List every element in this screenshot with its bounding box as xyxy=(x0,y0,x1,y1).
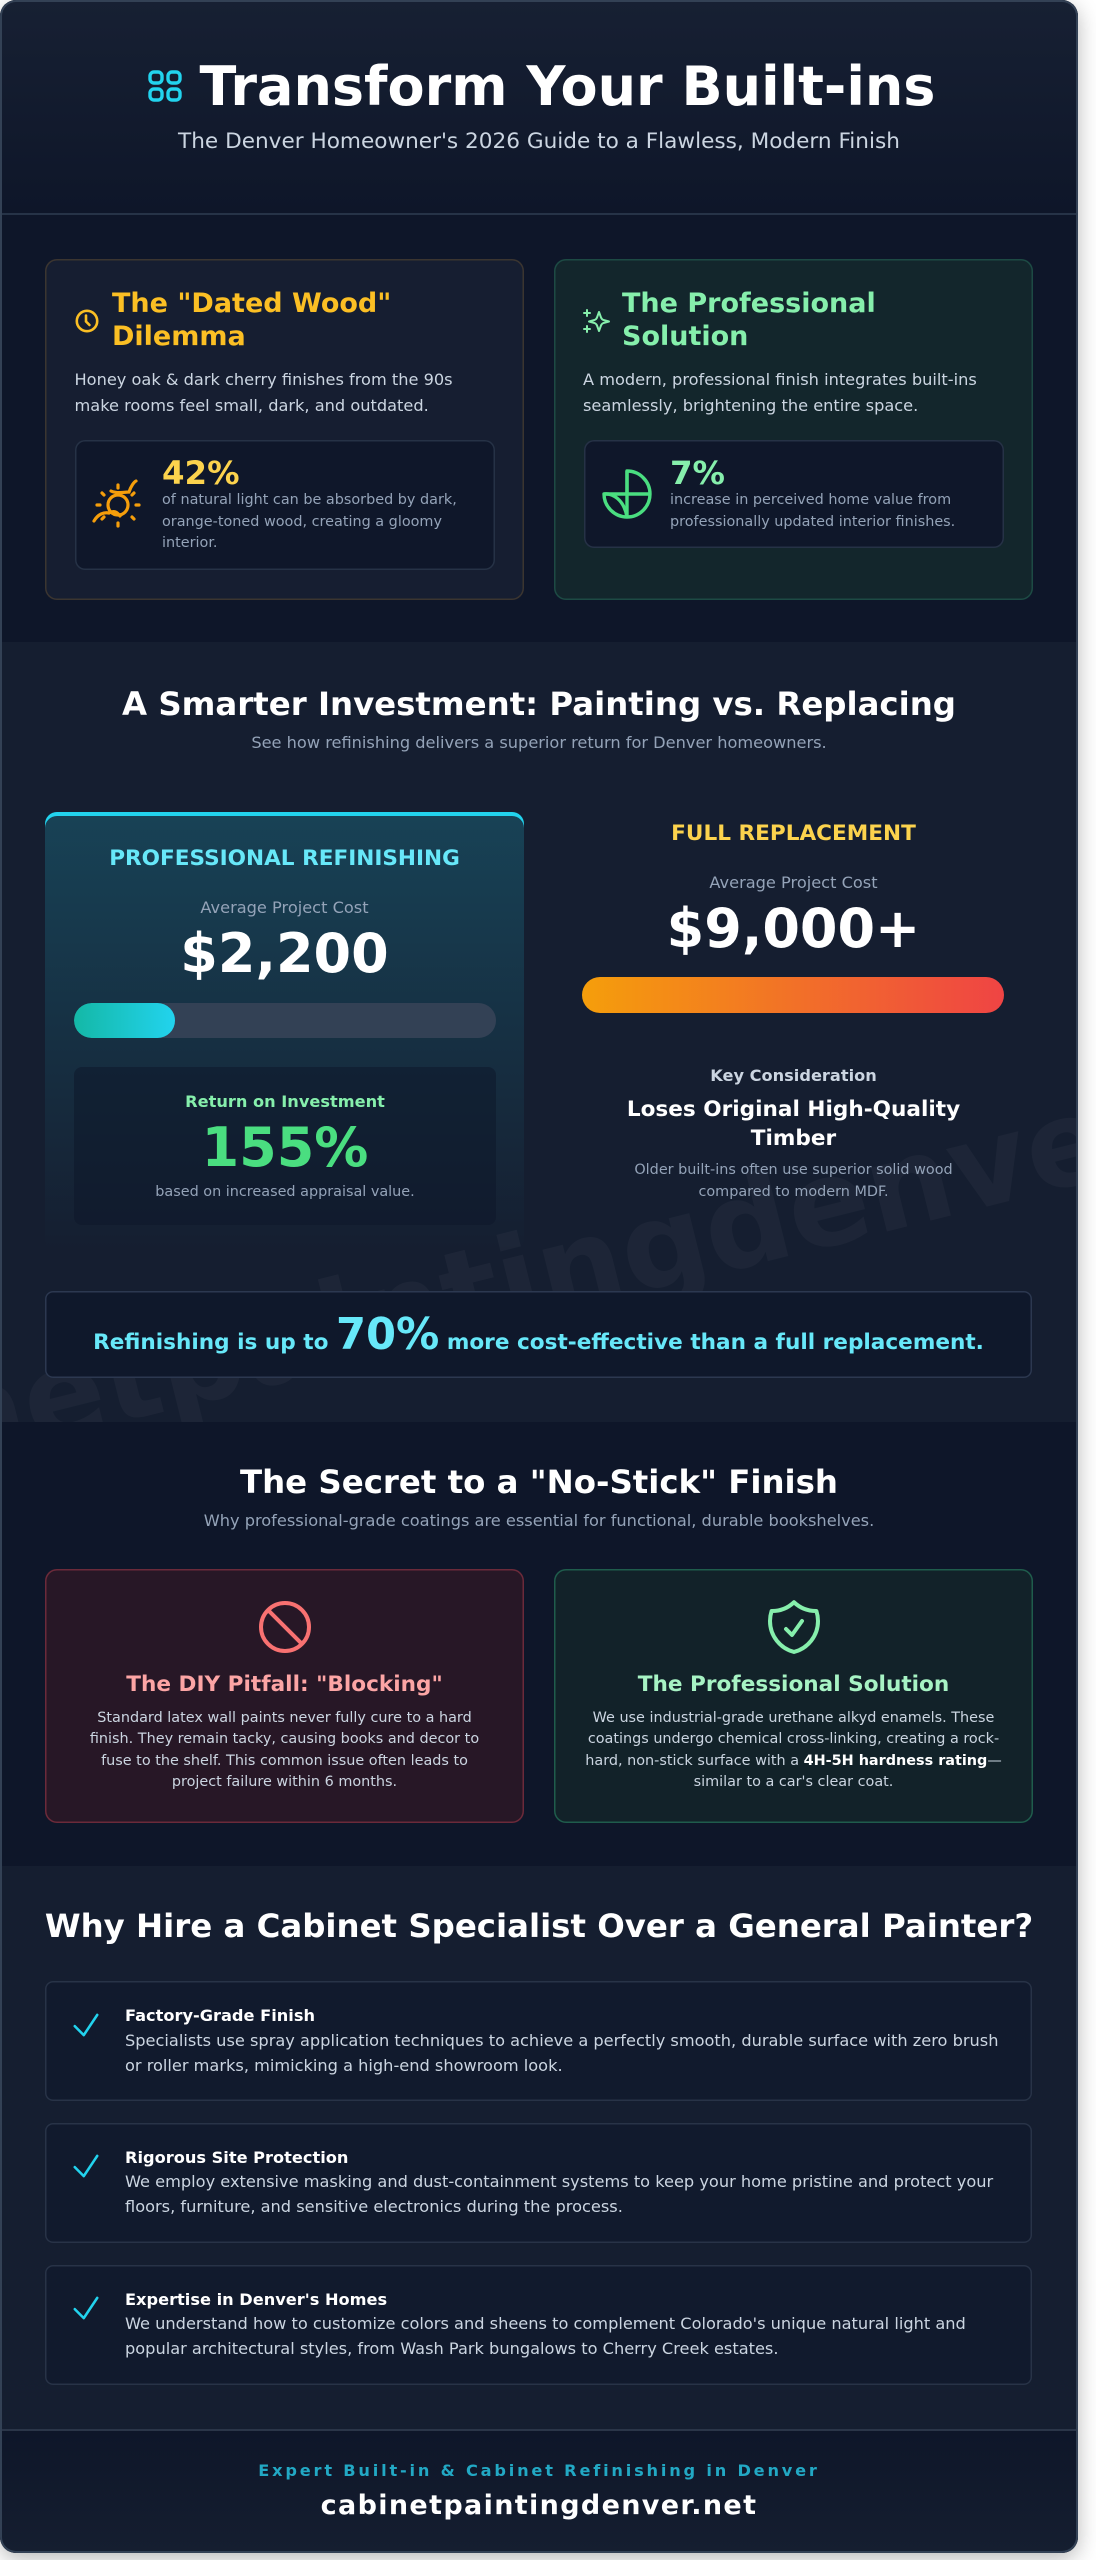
text: stat caption xyxy=(162,492,457,551)
text: section subtitle: Why professional-grade coatings are essential for functional, durable bookshelves. xyxy=(204,1511,874,1530)
header xyxy=(0,0,1078,215)
heading: professional solution: Solution xyxy=(622,321,748,352)
text: blocking description: finish. They remain tacky, causing books and decor to xyxy=(90,1731,479,1747)
subtitle: The Denver Homeowner's 2026 Guide to a Flawless, Modern Finish xyxy=(178,129,900,154)
text: stat caption xyxy=(670,492,955,530)
text: blocking description: fuse to the shelf. This common issue often leads to xyxy=(101,1753,468,1769)
heading: professional solution: The Professional Solution xyxy=(638,1672,949,1697)
text: protection description xyxy=(125,2172,994,2216)
callout: 70 percent banner: Refinishing is up to 70% more cost-effective than a full replacement. xyxy=(93,1310,984,1360)
text: solution description: A modern, professional finish integrates built-ins xyxy=(583,370,977,389)
icon: check xyxy=(73,2154,99,2178)
value: 7%: 7% xyxy=(670,454,725,492)
text: older built-ins: compared to modern MDF. xyxy=(698,1184,889,1200)
list item: site protection xyxy=(45,2122,1032,2242)
list item: denver expertise xyxy=(45,2264,1032,2384)
text: loses timber: Timber xyxy=(751,1126,836,1150)
text: older built-ins: Older built-ins often use superior solid wood xyxy=(634,1162,953,1178)
section: cost comparison xyxy=(0,642,1078,1422)
text: denver description: popular architectural styles, from Wash Park bungalows to Cherry Creek estates. xyxy=(125,2339,779,2358)
panel: full replacement xyxy=(582,821,1004,1200)
value: 155 percent: 155% xyxy=(202,1116,368,1179)
text: coating description: coatings undergo chemical cross-linking, creating a rock- xyxy=(588,1731,999,1747)
stat: 7 percent xyxy=(584,440,1004,548)
label: refinishing: PROFESSIONAL REFINISHING xyxy=(109,846,460,871)
heading: professional solution: The Professional xyxy=(622,288,876,319)
text: dated wood description: Honey oak & dark cherry finishes from the 90s xyxy=(74,370,453,389)
label: average cost: Average Project Cost xyxy=(709,872,878,892)
heading: dated wood xyxy=(112,288,391,352)
section: problem and solution xyxy=(0,215,1078,642)
label: full replacement: FULL REPLACEMENT xyxy=(671,821,916,846)
text: factory description: or roller marks, mimicking a high-end showroom look. xyxy=(125,2056,563,2074)
text: stat caption: increase in perceived home value from xyxy=(670,492,951,508)
text: loses timber: Loses Original High-Quality xyxy=(627,1096,960,1122)
text: coating description: similar to a car's clear coat. xyxy=(694,1774,893,1790)
tagline: Expert Built-in & Cabinet Refinishing in Denver xyxy=(258,2461,820,2480)
text: coating description xyxy=(585,1710,1002,1790)
text: denver description xyxy=(125,2314,966,2358)
panel: return on investment xyxy=(74,1067,496,1225)
text: older built-ins xyxy=(634,1162,953,1200)
text: loses timber xyxy=(627,1096,960,1150)
panel: diy pitfall xyxy=(45,1569,524,1823)
bar: replacement cost xyxy=(582,977,1004,1013)
website: cabinetpaintingdenver.net xyxy=(321,2490,757,2521)
icon: sun xyxy=(92,479,141,528)
icon: squares grid xyxy=(148,70,182,102)
heading: denver homes: Expertise in Denver's Homes xyxy=(125,2290,387,2308)
text: dated wood description xyxy=(74,370,453,415)
text: blocking description xyxy=(90,1710,479,1790)
stat: 42 percent xyxy=(75,440,495,570)
panel: professional solution xyxy=(554,259,1033,600)
value: 42%: 42% xyxy=(162,454,240,492)
label: average cost: Average Project Cost xyxy=(200,898,369,916)
text: section subtitle: See how refinishing delivers a superior return for Denver homeowners. xyxy=(251,733,827,752)
heading: dated wood: Dilemma xyxy=(112,321,246,352)
text: solution description: seamlessly, brightening the entire space. xyxy=(583,396,918,415)
icon: clock xyxy=(76,310,98,332)
text: blocking description: Standard latex wall paints never fully cure to a hard xyxy=(97,1710,472,1726)
value: 2200 dollars: $2,200 xyxy=(180,922,389,985)
heading: dated wood: The "Dated Wood" xyxy=(112,288,391,319)
text: factory description xyxy=(125,2030,998,2074)
icon: shield check xyxy=(768,1600,820,1654)
list item: factory finish xyxy=(45,1981,1032,2101)
callout: 70 percent banner xyxy=(45,1290,1032,1378)
heading: professional solution xyxy=(622,288,876,352)
heading: factory-grade finish: Factory-Grade Finish xyxy=(125,2006,315,2025)
icon: sparkles xyxy=(583,309,610,333)
text: factory description: Specialists use spray application techniques to achieve a perfectly smooth, durable surface with zero brush xyxy=(125,2030,998,2050)
bar: refinishing cost xyxy=(74,1003,496,1038)
text: protection description: floors, furniture, and sensitive electronics during the process. xyxy=(125,2197,623,2216)
icon: no symbol xyxy=(259,1601,311,1653)
title: Transform Your Built-ins xyxy=(200,55,935,118)
text: stat caption: orange-toned wood, creating a gloomy xyxy=(162,514,442,530)
text: blocking description: project failure within 6 months. xyxy=(172,1774,397,1790)
footer xyxy=(0,2429,1078,2553)
panel: dated wood dilemma xyxy=(45,259,524,600)
heading: why hire: Why Hire a Cabinet Specialist Over a General Painter? xyxy=(45,1907,1033,1945)
heading: smarter investment: A Smarter Investment: Painting vs. Replacing xyxy=(122,685,956,723)
text: stat caption: interior. xyxy=(162,535,218,551)
panel: professional coating xyxy=(554,1569,1033,1823)
panel: professional refinishing xyxy=(45,812,524,1252)
text: protection description: We employ extensive masking and dust-containment systems to keep your home pristine and protect your xyxy=(125,2172,993,2191)
text: solution description xyxy=(583,370,977,415)
icon: check xyxy=(73,2014,99,2036)
text: dated wood description: make rooms feel small, dark, and outdated. xyxy=(74,396,429,415)
heading: site protection: Rigorous Site Protection xyxy=(125,2148,348,2166)
text: stat caption: of natural light can be absorbed by dark, xyxy=(162,492,457,508)
text: coating description: hard, non-stick surface with a 4H-5H hardness rating— xyxy=(585,1753,1002,1769)
text: denver description: We understand how to customize colors and sheens to complement Colorado's unique natural light and xyxy=(125,2314,966,2333)
text: coating description: We use industrial-grade urethane alkyd enamels. These xyxy=(593,1710,994,1726)
section: why hire a specialist xyxy=(0,1866,1078,2429)
heading: no-stick: The Secret to a "No-Stick" Finish xyxy=(240,1463,838,1501)
heading: blocking: The DIY Pitfall: "Blocking" xyxy=(126,1672,443,1697)
label: roi: Return on Investment xyxy=(185,1092,385,1110)
label: key consideration: Key Consideration xyxy=(710,1066,877,1085)
section: no-stick finish xyxy=(0,1422,1078,1866)
icon: check xyxy=(73,2296,99,2320)
text: roi caption: based on increased appraisal value. xyxy=(155,1184,415,1200)
text: stat caption: professionally updated interior finishes. xyxy=(670,514,955,530)
icon: pie and leaf xyxy=(602,469,652,519)
value: 9000 dollars: $9,000+ xyxy=(667,897,920,960)
